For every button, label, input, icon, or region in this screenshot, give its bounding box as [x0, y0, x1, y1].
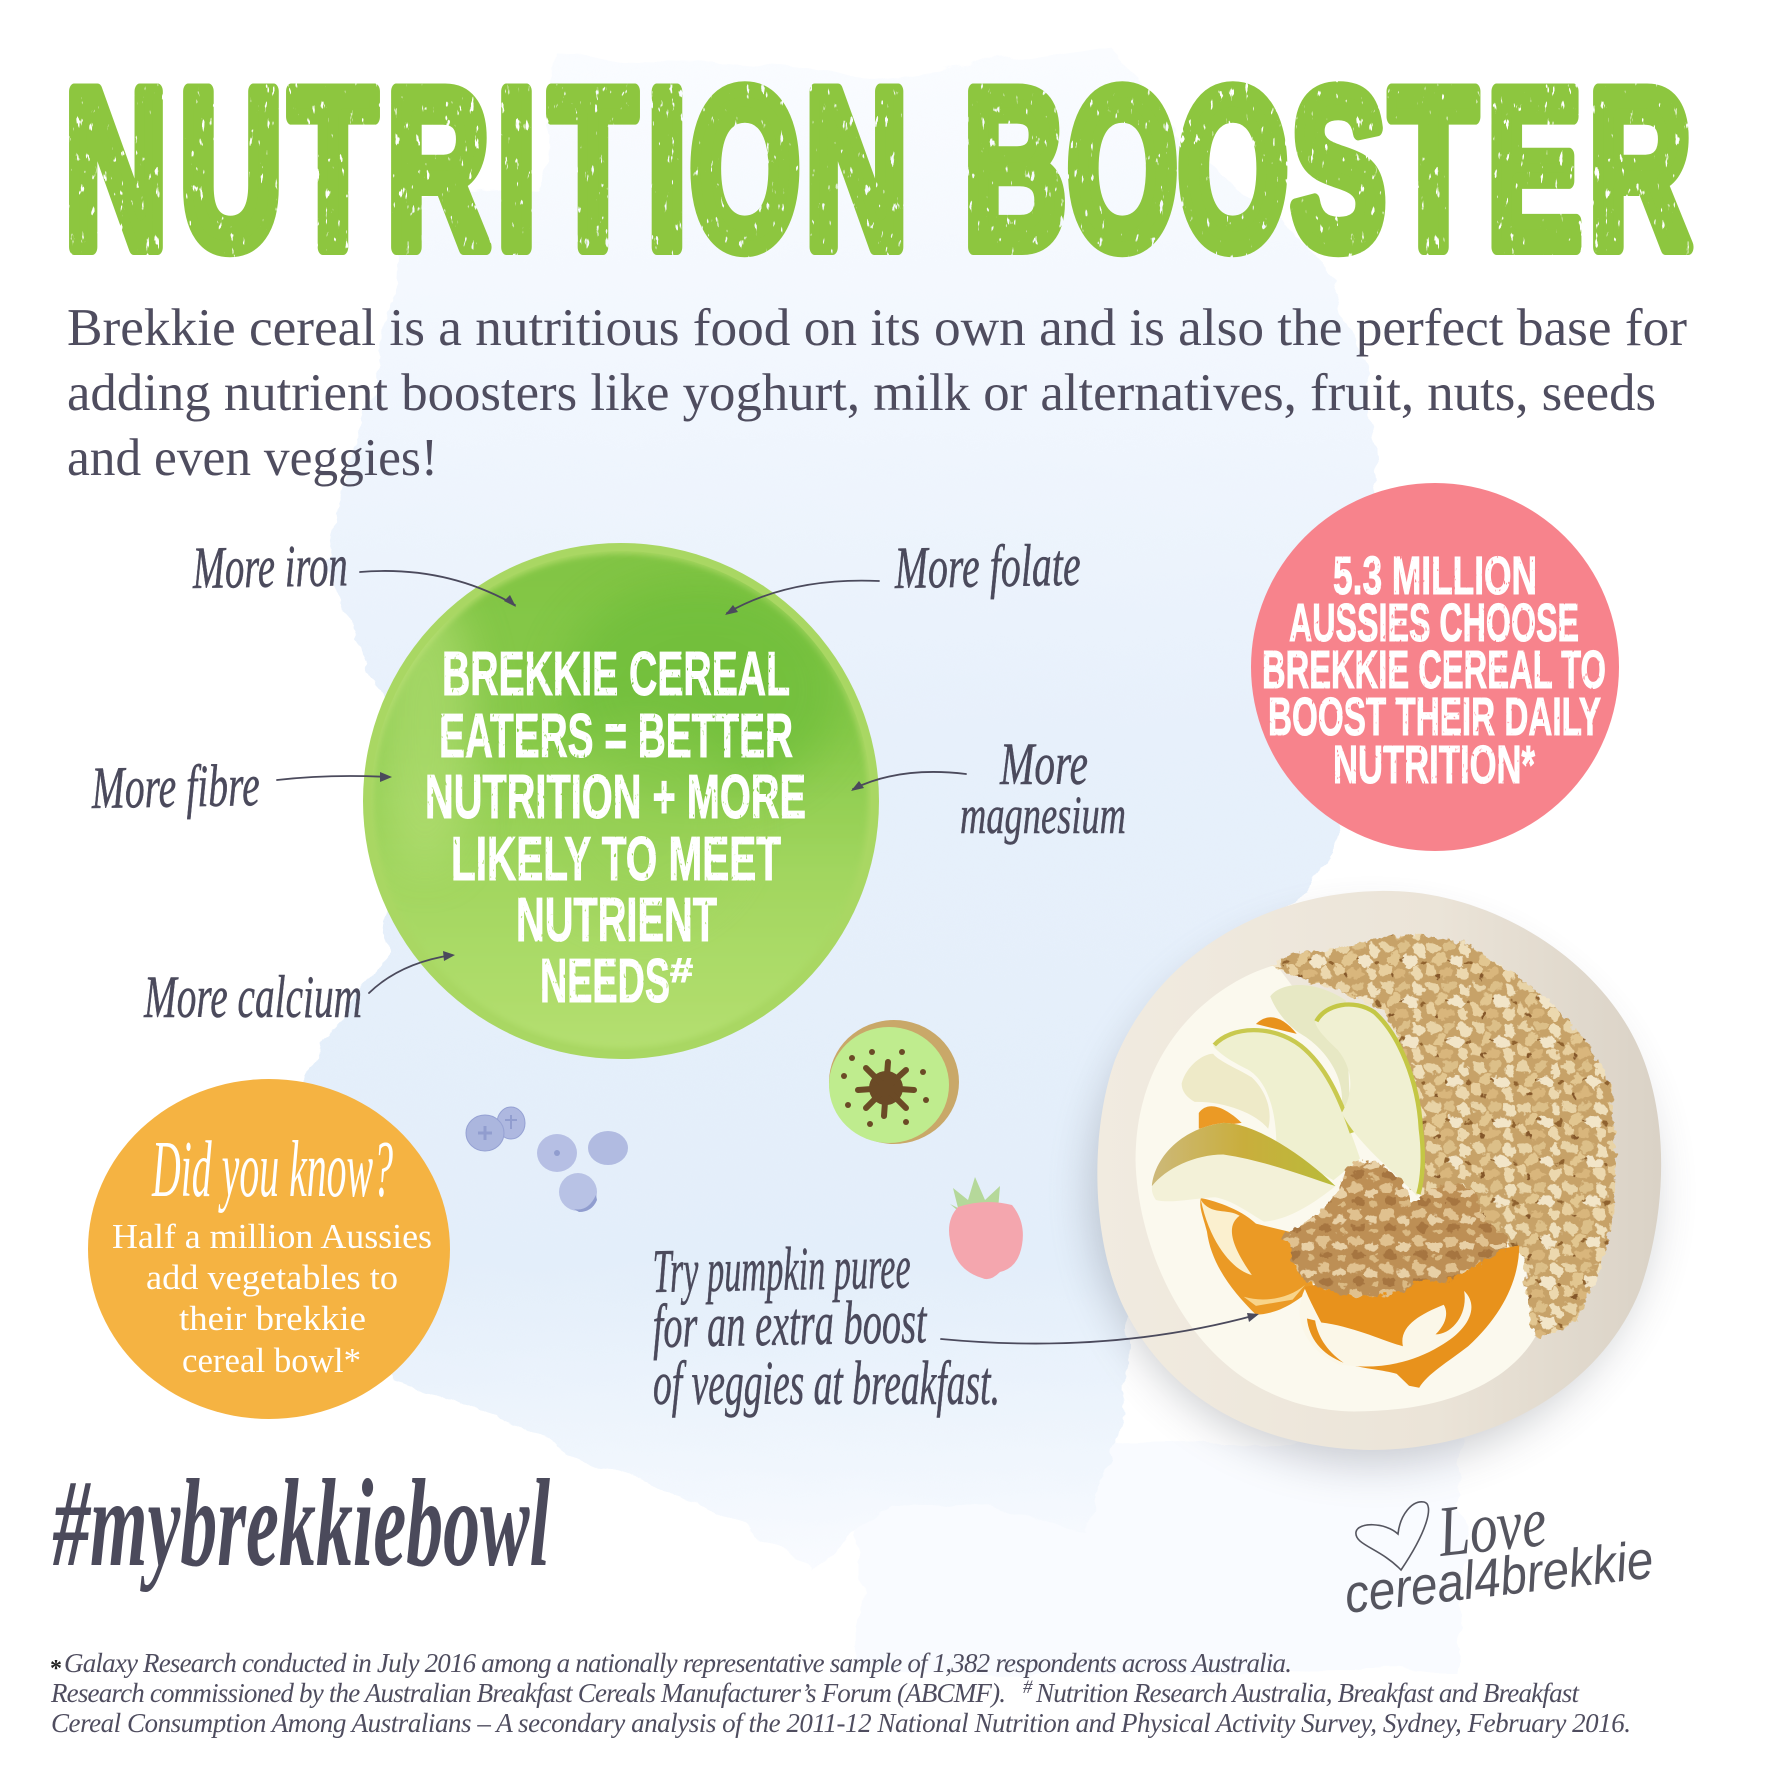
label: more magnesium: More: [999, 731, 1088, 797]
bowl message: EATERS = BETTER: [439, 702, 793, 771]
label: more folate: More folate: [893, 532, 1081, 601]
bowl message: BREKKIE CEREAL: [442, 640, 790, 709]
text: pumpkin tip: of veggies at breakfast.: [653, 1350, 1000, 1418]
callout: 5.3 million aussies: 5.3 MILLION: [1333, 546, 1537, 606]
icon: blueberries: [466, 1107, 628, 1212]
arrow: fibre: [277, 772, 392, 782]
label: more magnesium: magnesium: [960, 785, 1126, 845]
footnotes: [50, 1648, 1631, 1738]
logo: love cereal4brekkie: cereal4brekkie: [1341, 1530, 1656, 1625]
title: NUTRITION BOOSTER: [65, 44, 1691, 296]
did you know body: add vegetables to: [146, 1258, 398, 1297]
footnotes: Research commissioned by the Australian Breakfast Cereals Manufacturer’s Forum (ABCMF).: [50, 1678, 1006, 1708]
arrow: calcium: [369, 951, 455, 993]
bowl message: [425, 640, 806, 1016]
label: more iron: More iron: [191, 532, 348, 601]
logo: love cereal4brekkie: [1341, 1481, 1656, 1625]
intro text: Brekkie cereal is a nutritious food on its own and is also the perfect base for: [67, 299, 1687, 357]
icon: raspberry: [949, 1177, 1023, 1279]
footnotes: Cereal Consumption Among Australians – A secondary analysis of the 2011-12 National Nutrition and Physical Activity Survey, Sydney, February 2016.: [51, 1708, 1631, 1738]
label: more fibre: More fibre: [90, 752, 260, 821]
callout: 5.3 million aussies: NUTRITION*: [1333, 735, 1535, 795]
bowl message: LIKELY TO MEET: [451, 825, 781, 894]
pear slices: [1152, 985, 1423, 1222]
arrow: iron: [360, 571, 516, 607]
did you know body: [112, 1217, 432, 1380]
footnotes: Galaxy Research conducted in July 2016 among a nationally representative sample of 1,382 respondents across Australia.: [64, 1648, 1292, 1678]
photo: breakfast bowl: [1092, 891, 1661, 1464]
footnotes: *: [50, 1656, 62, 1682]
intro text: and even veggies!: [67, 429, 438, 487]
panel: green bowl with key message: [363, 543, 879, 1059]
callout: did you know: [88, 1079, 450, 1419]
did you know body: cereal bowl*: [182, 1341, 361, 1380]
bowl message: #: [670, 952, 693, 990]
icon: heart: [1356, 1502, 1429, 1570]
intro text: adding nutrient boosters like yoghurt, milk or alternatives, fruit, nuts, seeds: [67, 364, 1656, 422]
yoghurt: [1136, 965, 1536, 1411]
text: pumpkin tip: Try pumpkin puree: [652, 1234, 911, 1306]
footnotes: #: [1023, 1677, 1033, 1698]
logo: love cereal4brekkie: Love: [1434, 1481, 1550, 1572]
callout: 5.3 million aussies: AUSSIES CHOOSE: [1289, 593, 1579, 653]
did you know body: their brekkie: [179, 1299, 366, 1338]
footnotes: Nutrition Research Australia, Breakfast and Breakfast: [1035, 1678, 1580, 1708]
label: more calcium: More calcium: [143, 964, 362, 1030]
callout: did you know: Did you know?: [152, 1126, 393, 1214]
walnuts: [1280, 1160, 1509, 1296]
arrow: folate: [725, 581, 879, 615]
intro text: [67, 299, 1687, 487]
icon: kiwi: [829, 1020, 959, 1144]
bowl message: NUTRIENT: [516, 886, 717, 955]
hashtag: #mybrekkiebowl: [52, 1455, 550, 1593]
granola: [1272, 936, 1615, 1336]
text: pumpkin tip: [652, 1234, 1000, 1418]
label: more magnesium: [960, 731, 1126, 845]
bowl message: NEEDS: [540, 947, 670, 1016]
did you know body: Half a million Aussies: [112, 1217, 432, 1256]
callout: 5.3 million aussies: [1251, 483, 1619, 851]
pumpkin swirl: [1199, 1017, 1519, 1388]
bowl message: NUTRITION + MORE: [425, 763, 806, 832]
arrow: pumpkin: [941, 1313, 1259, 1344]
arrow: magnesium: [851, 772, 966, 791]
text: pumpkin tip: for an extra boost: [652, 1288, 928, 1361]
background: pale blue watercolour wash: [305, 43, 1463, 1675]
